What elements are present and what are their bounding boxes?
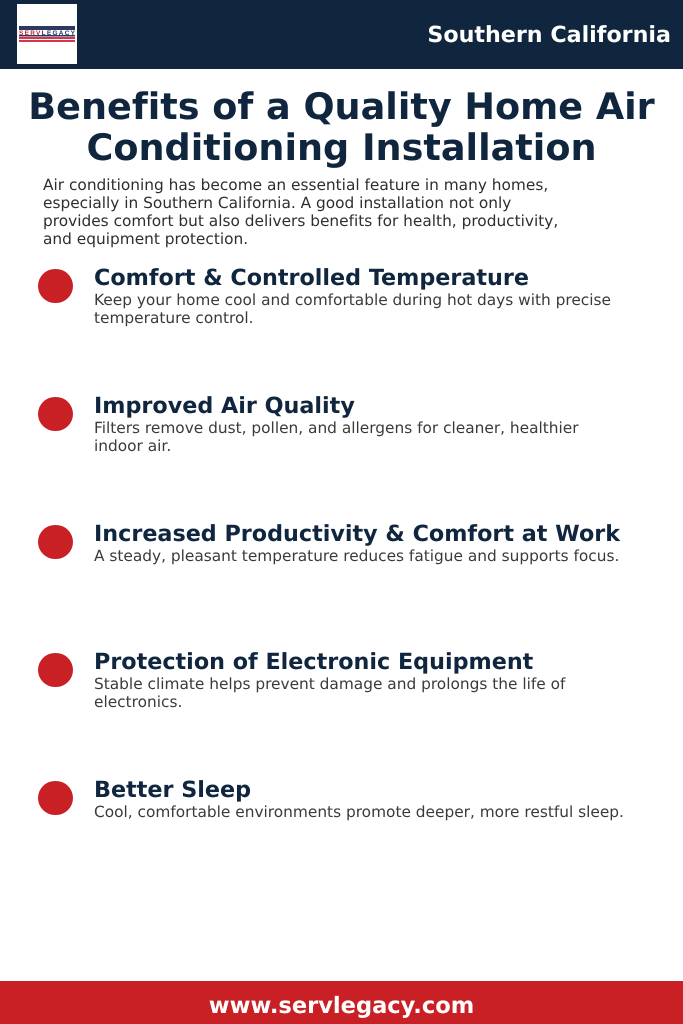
website: www.servlegacy.com (209, 993, 474, 1019)
description: electronics. (94, 693, 182, 711)
intro text: provides comfort but also delivers benefits for health, productivity, (43, 212, 558, 230)
heading: Protection of Electronic Equipment (94, 649, 533, 675)
logo: SERVLEGACY (19, 30, 76, 37)
description: A steady, pleasant temperature reduces fatigue and supports focus. (94, 547, 619, 565)
intro text (43, 176, 558, 248)
intro text: Air conditioning has become an essential feature in many homes, (43, 176, 548, 194)
benefit: comfort (38, 265, 611, 327)
title (28, 85, 655, 169)
intro text: especially in Southern California. A good installation not only (43, 194, 511, 212)
title: Conditioning Installation (87, 126, 596, 169)
description: Filters remove dust, pollen, and allergens for cleaner, healthier (94, 419, 579, 437)
description: Keep your home cool and comfortable during hot days with precise (94, 291, 611, 309)
heading: Better Sleep (94, 777, 251, 803)
heading: Comfort & Controlled Temperature (94, 265, 529, 291)
icon: red dot (38, 524, 73, 559)
description: temperature control. (94, 309, 254, 327)
logo (17, 4, 77, 64)
icon: red dot (38, 652, 73, 687)
benefit: electronics (38, 649, 566, 711)
title: Benefits of a Quality Home Air (28, 85, 655, 128)
description: Cool, comfortable environments promote deeper, more restful sleep. (94, 803, 624, 821)
icon: red dot (38, 396, 73, 431)
description: Stable climate helps prevent damage and prolongs the life of (94, 675, 565, 693)
description (94, 291, 611, 327)
header bar (0, 0, 683, 69)
region label: Southern California (427, 22, 671, 48)
benefit: sleep (38, 777, 624, 821)
icon: red dot (38, 268, 73, 303)
description (94, 419, 579, 455)
intro text: and equipment protection. (43, 230, 248, 248)
heading: Improved Air Quality (94, 393, 355, 419)
description (94, 675, 566, 711)
heading: Increased Productivity & Comfort at Work (94, 521, 620, 547)
benefit: air quality (38, 393, 579, 455)
description: indoor air. (94, 437, 171, 455)
icon: red dot (38, 780, 73, 815)
footer bar (0, 981, 683, 1024)
benefit: productivity (38, 521, 620, 565)
